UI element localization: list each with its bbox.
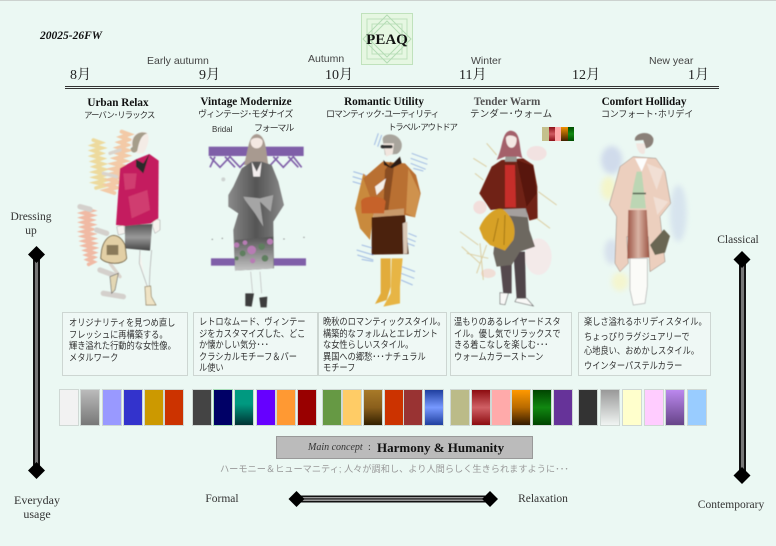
axis label: Formal: Formal xyxy=(205,493,239,505)
panel: Romantic Utility description: 異国への郷愁･･･ナチュラル xyxy=(323,352,426,363)
arrow: left vertical axis xyxy=(28,246,45,479)
tag: Travel Outdoor: トラベル･アウトドア xyxy=(388,122,457,132)
logo: PEAQ: PEAQ xyxy=(366,32,408,48)
figure: Urban Relax xyxy=(80,132,160,305)
panel: Romantic Utility description: 晩秋のロマンティックスタイル。 xyxy=(323,317,446,328)
arrow: right vertical axis xyxy=(734,251,750,484)
concept subtitle: ハーモニー＆ヒューマニティ; 人々が調和し、より人間らしく生きられますように･･･ xyxy=(220,464,569,474)
axis label: Everyday usage xyxy=(14,493,60,521)
season: autumn: Autumn xyxy=(308,53,344,65)
axis label: Contemporary: Contemporary xyxy=(698,499,764,511)
tag: Bridal: Bridal xyxy=(212,125,232,134)
figure: Comfort Holliday xyxy=(601,133,687,305)
panel: Vintage Modernize description: ジをカスタマイズした、どこ xyxy=(199,329,305,340)
main concept banner: : xyxy=(368,442,371,453)
season label: 20025-26FW xyxy=(40,30,102,42)
timeline double rule xyxy=(65,86,719,89)
axis label: Dressing up xyxy=(10,211,52,237)
panel: Vintage Modernize description: クラシカルモチーフ＆パー xyxy=(199,352,297,363)
season: winter: Winter xyxy=(471,55,501,67)
month: January: 1月 xyxy=(688,68,709,83)
axis label: Classical: Classical xyxy=(717,234,759,246)
month: December: 12月 xyxy=(572,68,600,83)
panel: Comfort Holliday description xyxy=(578,312,711,376)
panel: Urban Relax description: オリジナリティを見つめ直し xyxy=(69,318,175,329)
panel: Comfort Holliday description: 楽しさ溢れるホリディスタイル。 xyxy=(584,317,707,328)
panel: Vintage Modernize description: ル使い xyxy=(199,363,224,374)
arrow: horizontal axis xyxy=(288,491,498,507)
theme title: Romantic Utility: Romantic Utility xyxy=(344,96,424,108)
panel: Vintage Modernize description: か懐かしい気分･･･ xyxy=(199,340,269,351)
mini palette xyxy=(542,127,574,141)
panel: Tender Warm description xyxy=(450,312,572,376)
panel: Tender Warm description: 温もりのあるレイヤードスタ xyxy=(454,317,561,328)
theme title: Comfort Holliday: Comfort Holliday xyxy=(602,96,686,108)
axis label: Dressing up: up xyxy=(25,225,37,237)
palette: Tender Warm xyxy=(450,389,573,426)
axis label: Relaxation: Relaxation xyxy=(518,493,568,505)
logo: PEAQ xyxy=(361,13,413,65)
panel: Vintage Modernize description xyxy=(193,312,318,376)
panel: Romantic Utility description xyxy=(318,312,447,376)
figure: Vintage Modernize xyxy=(209,134,306,307)
panel: Urban Relax description: フレッシュに再構築する。 xyxy=(69,330,168,341)
theme kana: Romantic Utility: ロマンティック･ユーティリティ xyxy=(326,109,438,119)
panel: Comfort Holliday description: 心地良い、おめかしスタイル。 xyxy=(584,346,699,357)
theme kana: Vintage Modernize: ヴィンテージ･モダナイズ xyxy=(198,109,293,119)
panel: Comfort Holliday description: ちょっぴりラグジュアリーで xyxy=(584,332,690,343)
panel: Tender Warm description: きる着こなしを楽しむ･･･ xyxy=(454,340,548,351)
panel: Urban Relax description xyxy=(62,312,188,376)
axis label: Everyday usage: Everyday xyxy=(14,493,60,507)
palette: Urban Relax xyxy=(59,389,184,426)
month: November: 11月 xyxy=(459,68,486,83)
panel: Romantic Utility description: な女性らしいスタイル。 xyxy=(323,340,413,351)
axis label: Dressing up: Dressing xyxy=(11,211,51,223)
theme title: Tender Warm: Tender Warm xyxy=(474,96,540,108)
month: September: 9月 xyxy=(199,68,220,83)
main concept banner: Harmony & Humanity xyxy=(377,440,504,455)
axis label: Everyday usage: usage xyxy=(23,507,51,521)
panel: Urban Relax description: メタルワーク xyxy=(69,353,118,364)
month: August: 8月 xyxy=(70,68,91,83)
palette: Comfort Holliday xyxy=(578,389,707,426)
tag: Formal: フォーマル xyxy=(254,123,293,133)
panel: Romantic Utility description: モチーフ xyxy=(323,363,355,374)
palette: Vintage Modernize xyxy=(192,389,317,426)
panel: Urban Relax description: 輝き溢れた行動的な女性像。 xyxy=(69,341,176,352)
panel: Tender Warm description: ウォームカラーストーン xyxy=(454,352,543,363)
panel: Vintage Modernize description: レトロなムード、ヴィンテー xyxy=(199,317,306,328)
month: October: 10月 xyxy=(325,68,353,83)
theme title: Vintage Modernize: Vintage Modernize xyxy=(200,96,292,108)
panel: Romantic Utility description: 構築的なフォルムとエレガント xyxy=(323,329,438,340)
main concept banner: Main concept xyxy=(308,442,363,453)
panel: Comfort Holliday description: ウインターパステルカラー xyxy=(584,361,682,372)
palette: Romantic Utility xyxy=(322,389,444,426)
season: early autumn: Early autumn xyxy=(147,55,209,67)
figure: Tender Warm xyxy=(460,131,557,306)
main concept banner xyxy=(276,436,533,459)
theme kana: Comfort Holliday: コンフォート･ホリデイ xyxy=(601,109,693,119)
season: new year: New year xyxy=(649,55,693,67)
theme kana: Urban Relax: アーバン･リラックス xyxy=(84,110,154,120)
panel: Tender Warm description: イル。優し気でリラックスで xyxy=(454,329,561,340)
theme kana: Tender Warm: テンダー･ウォーム xyxy=(470,109,552,120)
figure: Romantic Utility xyxy=(353,133,428,307)
theme title: Urban Relax: Urban Relax xyxy=(87,97,149,109)
